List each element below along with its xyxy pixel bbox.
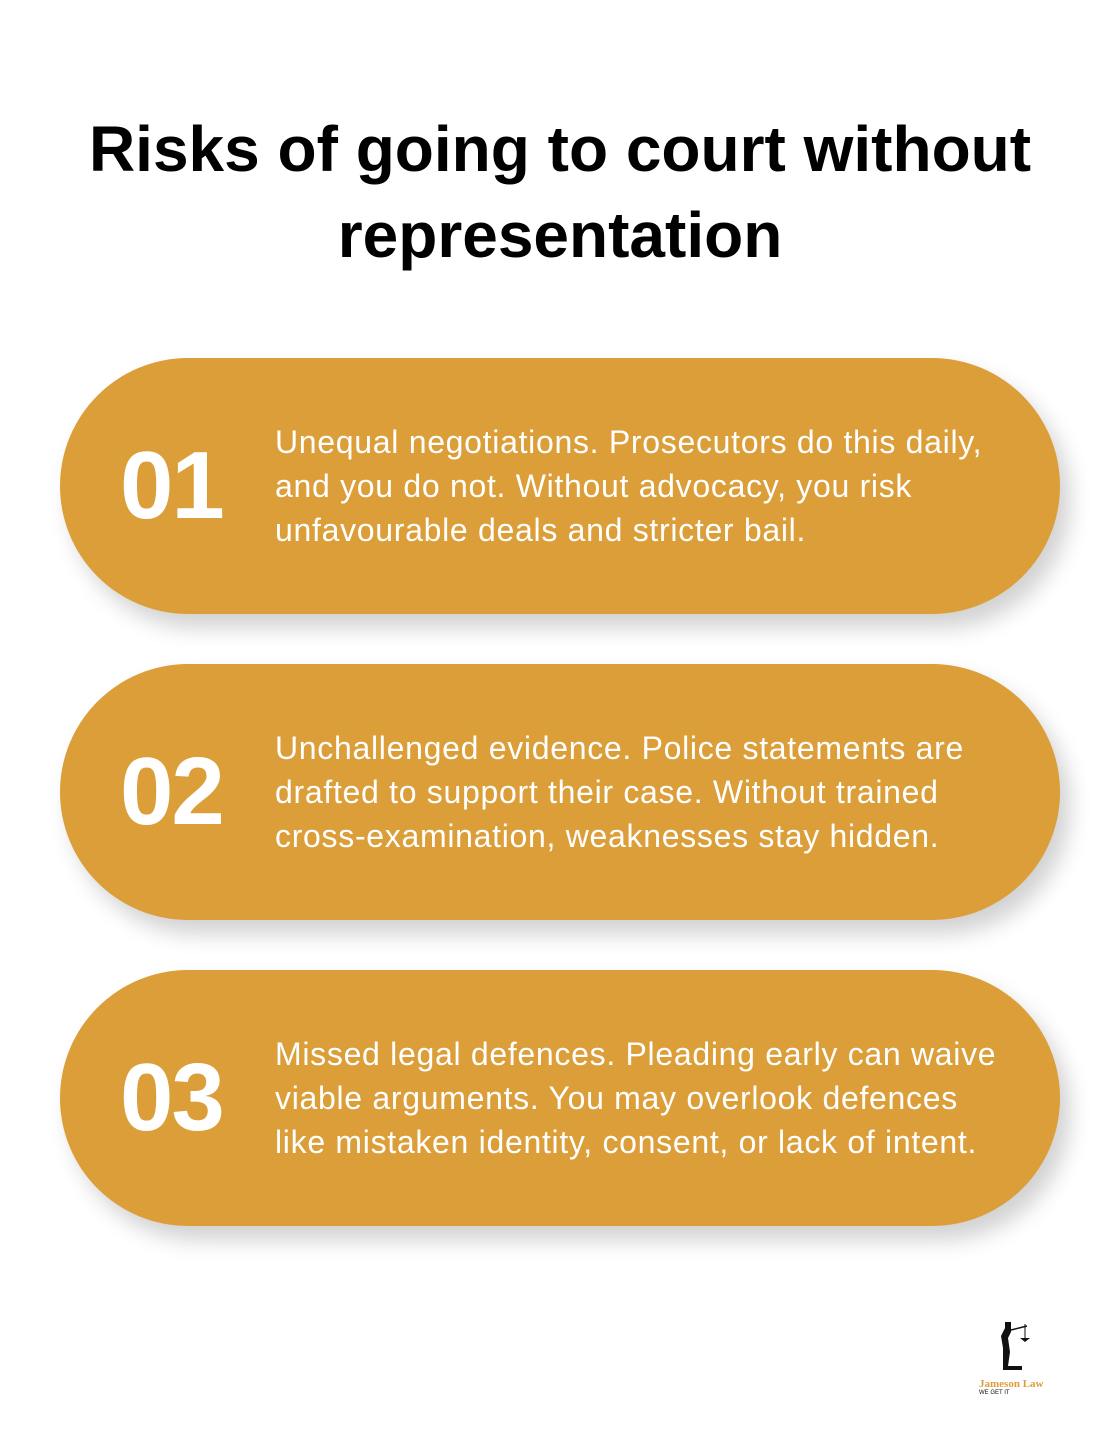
card 03 [60, 970, 1060, 1226]
number 02: 02 [120, 738, 223, 845]
text 03 [275, 1036, 996, 1160]
card 02 [60, 664, 1060, 920]
text 02: drafted to support their case. Without trained [275, 774, 939, 810]
title: representation [338, 199, 782, 271]
text 01: unfavourable deals and stricter bail. [275, 512, 806, 548]
title: Risks of going to court without [89, 113, 1031, 185]
logo: Jameson Law [979, 1378, 1043, 1390]
text 02: Unchallenged evidence. Police statements are [275, 730, 964, 766]
text 02: cross-examination, weaknesses stay hidden. [275, 818, 939, 854]
text 03: viable arguments. You may overlook defences [275, 1080, 958, 1116]
text 01: Unequal negotiations. Prosecutors do this daily, [275, 424, 982, 460]
text 03: like mistaken identity, consent, or lack of intent. [275, 1124, 977, 1160]
logo [979, 1322, 1044, 1396]
text 02 [275, 730, 964, 854]
number 01: 01 [120, 432, 223, 539]
card 01 [60, 358, 1060, 614]
text 01: and you do not. Without advocacy, you risk [275, 468, 912, 504]
logo: WE GET IT [979, 1390, 1010, 1396]
text 03: Missed legal defences. Pleading early can waive [275, 1036, 996, 1072]
number 03: 03 [120, 1044, 223, 1151]
text 01 [275, 424, 982, 548]
title [89, 113, 1031, 271]
